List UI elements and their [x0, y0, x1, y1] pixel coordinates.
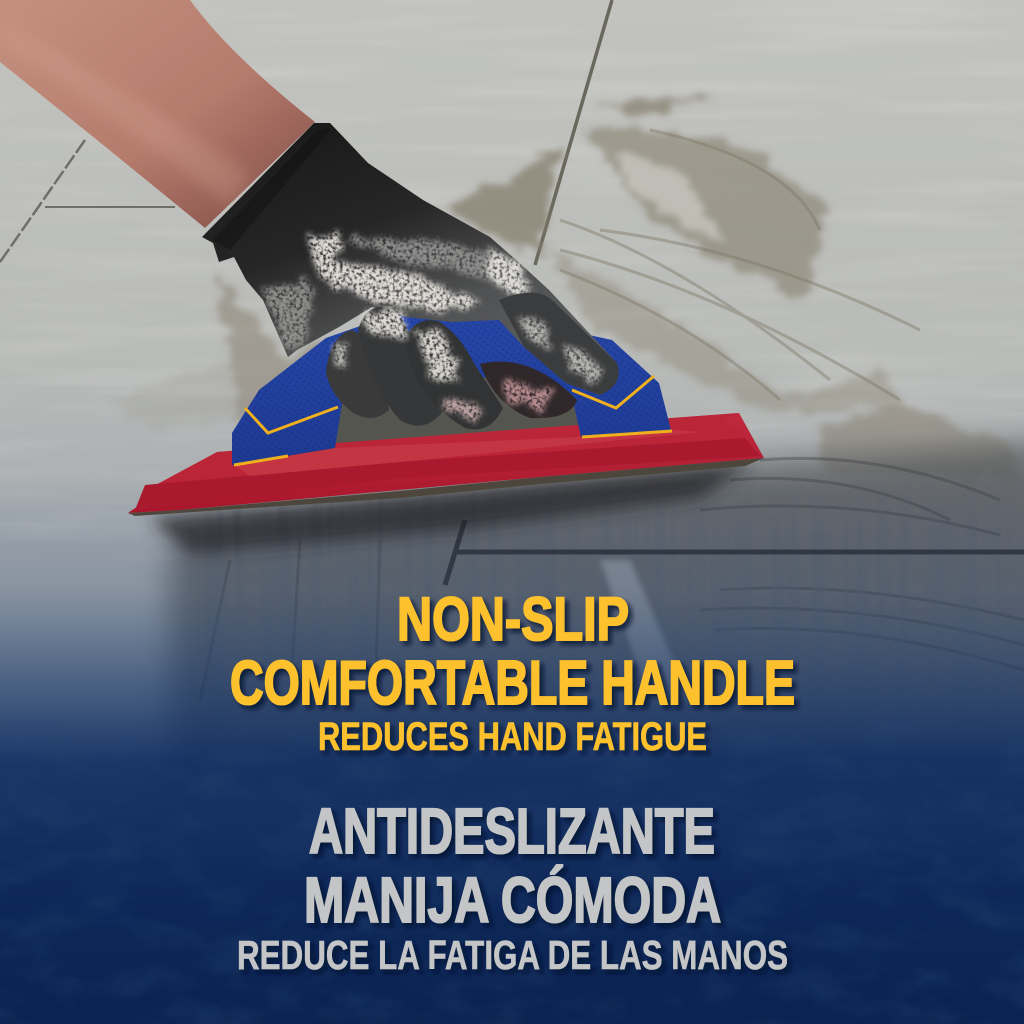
grout dust on glove	[262, 232, 530, 355]
headline: English	[230, 585, 795, 759]
REDUCE LA FATIGA DE LAS MANOS: REDUCE LA FATIGA DE LAS MANOS	[237, 932, 788, 978]
tile joints	[0, 0, 612, 265]
yellow accents	[234, 376, 672, 465]
glove body	[202, 123, 617, 395]
float top highlight	[234, 430, 700, 476]
arm	[0, 0, 315, 228]
blue handle	[232, 312, 671, 465]
glove	[202, 123, 619, 429]
cuff fold	[212, 128, 332, 250]
blue gradient overlay	[0, 480, 1024, 1024]
grout spread behind float	[152, 422, 1024, 756]
REDUCES HAND FATIGUE: REDUCES HAND FATIGUE	[318, 715, 707, 759]
red float base	[128, 413, 764, 513]
curled fingers	[480, 362, 577, 418]
float grout edge	[128, 458, 764, 516]
MANIJA CÓMODA: MANIJA CÓMODA	[304, 864, 721, 936]
ANTIDESLIZANTE: ANTIDESLIZANTE	[309, 795, 715, 867]
grip opening	[332, 375, 590, 450]
mottled texture in blue	[0, 720, 1024, 1024]
trowel float	[128, 312, 764, 516]
grout smears	[110, 95, 1024, 480]
floor texture	[0, 0, 1024, 560]
COMFORTABLE HANDLE: COMFORTABLE HANDLE	[230, 649, 795, 718]
finger dust	[362, 312, 410, 342]
float shadow	[150, 462, 755, 555]
headline: Spanish	[237, 795, 788, 978]
thumb	[499, 292, 619, 395]
NON-SLIP: NON-SLIP	[397, 585, 629, 653]
